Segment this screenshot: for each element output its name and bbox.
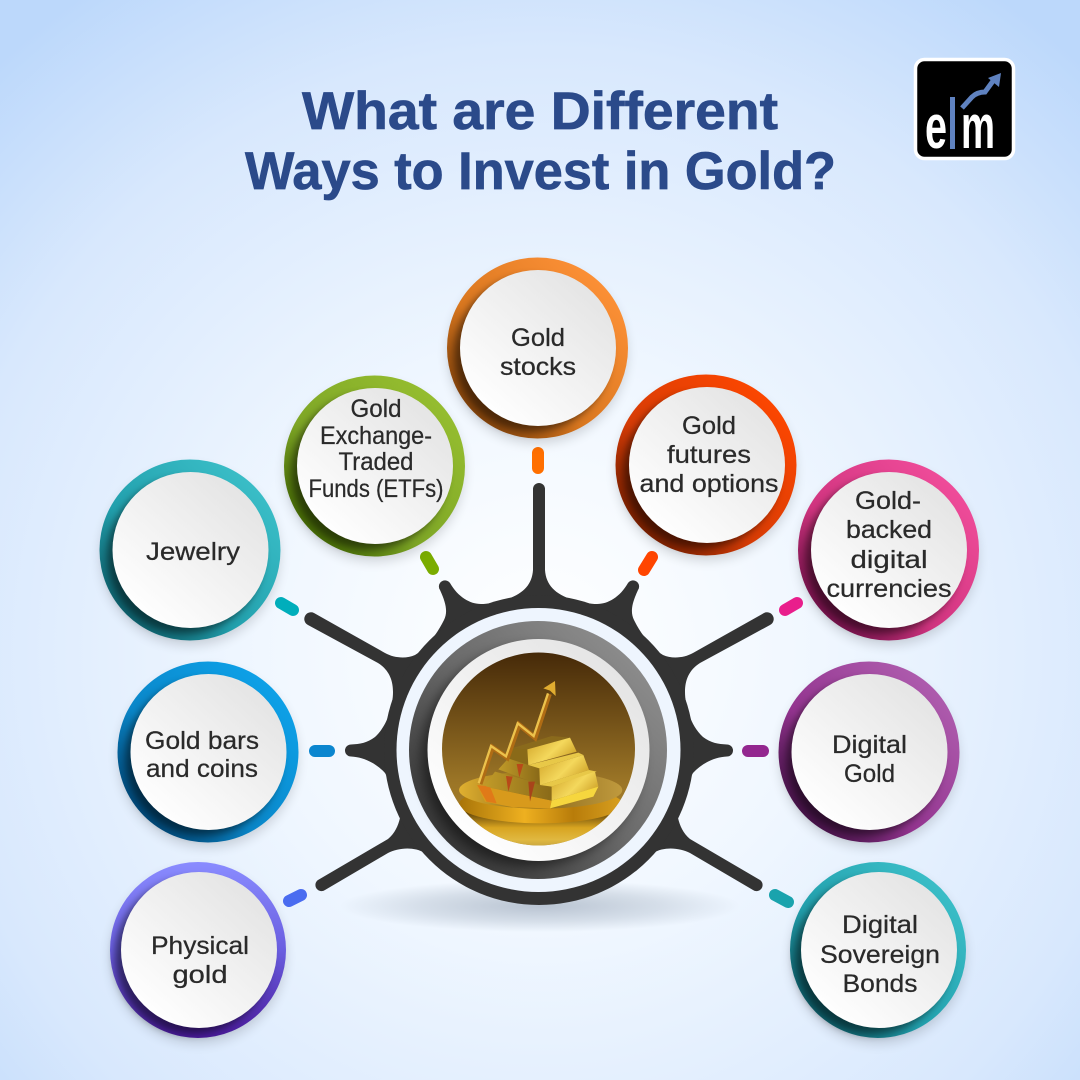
node: Gold futures and options <box>616 374 796 560</box>
hub floor shadow <box>340 880 740 932</box>
node: Digital Gold: Digital <box>832 731 907 759</box>
node: Physical gold <box>110 862 286 1043</box>
node: Gold bars and coins: and coins <box>146 755 258 783</box>
node: Jewelry: Jewelry <box>146 538 241 566</box>
node: Gold-backed digital currencies: backed <box>846 516 932 544</box>
node: Gold-backed digital currencies: digital <box>850 546 928 574</box>
logo: elm: m <box>961 93 995 162</box>
node: Gold stocks: Gold <box>511 324 565 352</box>
node: Digital Sovereign Bonds: Sovereign <box>820 941 940 969</box>
node: Gold ETFs: Gold <box>350 395 402 423</box>
node: Gold stocks <box>447 258 628 443</box>
logo: elm <box>916 60 1014 162</box>
node: Gold futures and options: Gold <box>682 412 736 440</box>
node: Gold ETFs <box>284 376 465 561</box>
icon: gold bars on a plate with rising arrow <box>440 650 640 852</box>
node: Gold-backed digital currencies: currencies <box>826 575 952 603</box>
node: Gold ETFs: Exchange- <box>320 422 432 450</box>
logo: elm: e <box>925 93 947 162</box>
node: Gold ETFs: Traded <box>338 448 414 476</box>
node: Digital Sovereign Bonds: Digital <box>842 911 918 939</box>
node: Jewelry <box>100 460 280 645</box>
node: Gold ETFs: Funds (ETFs) <box>308 475 444 503</box>
hub: dark spoked ring <box>304 489 774 905</box>
node: Gold bars and coins <box>118 662 298 847</box>
node: Digital Sovereign Bonds: Bonds <box>842 970 918 998</box>
hub: concentric rings <box>396 608 680 892</box>
node: Physical gold: Physical <box>151 932 249 960</box>
node: Digital Gold <box>778 662 960 847</box>
node: Digital Sovereign Bonds <box>790 862 966 1043</box>
node: Gold futures and options: and options <box>640 470 778 498</box>
node: Gold bars and coins: Gold bars <box>145 727 259 755</box>
node: Gold-backed digital currencies <box>798 460 979 645</box>
node: Physical gold: gold <box>172 961 228 989</box>
title <box>245 82 836 201</box>
node: Gold-backed digital currencies: Gold- <box>855 487 921 515</box>
connector dashes <box>281 453 797 902</box>
title: Ways to Invest in Gold? <box>245 142 836 201</box>
node: Gold stocks: stocks <box>500 353 576 381</box>
title: What are Different <box>302 82 778 141</box>
node: Gold futures and options: futures <box>667 441 751 469</box>
node: Digital Gold: Gold <box>844 760 895 788</box>
